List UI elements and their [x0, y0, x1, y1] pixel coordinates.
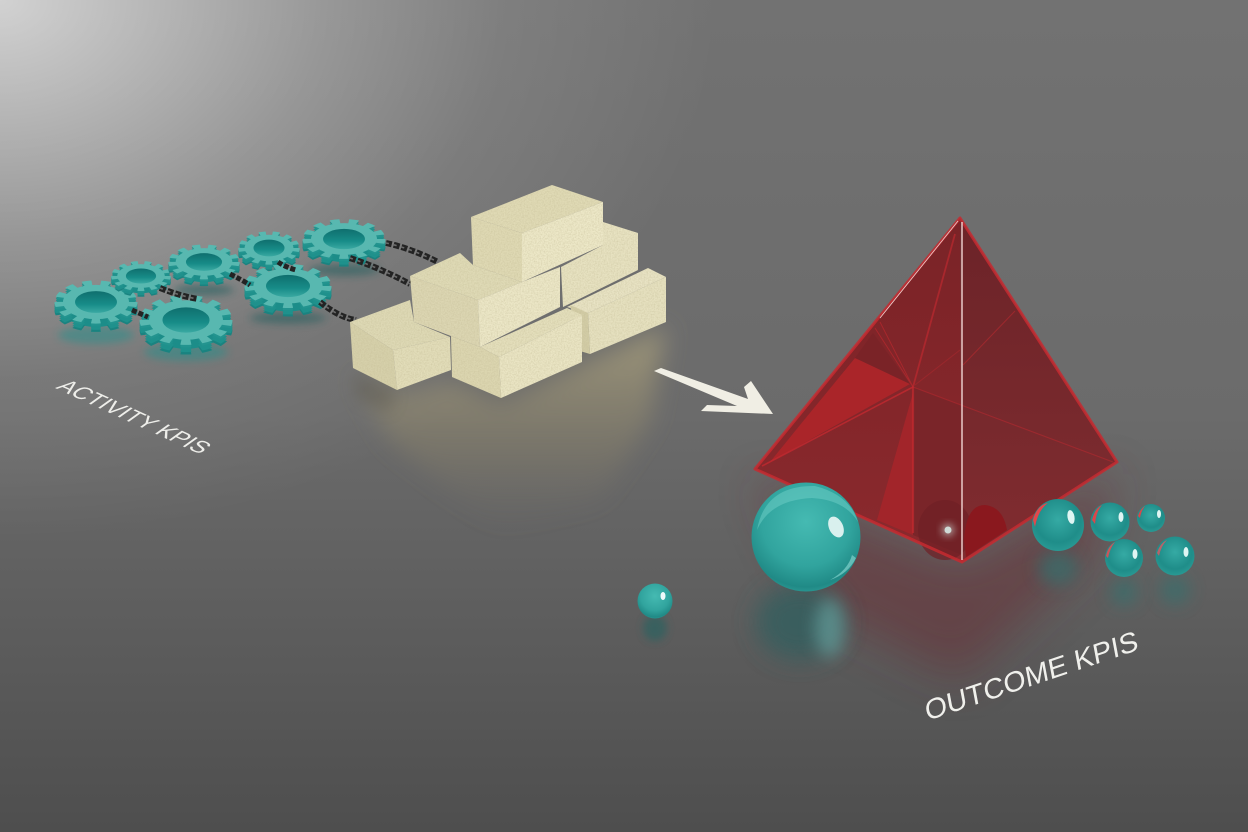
activity gears group: [60, 222, 380, 351]
sphere 4: [1105, 539, 1143, 577]
sphere 3: [1137, 504, 1165, 532]
brick: front centre: [451, 308, 582, 398]
gear 7: [308, 222, 380, 264]
chains linking gears to bricks: [132, 243, 438, 320]
floor reflection of bricks: [354, 328, 665, 530]
glass pyramid: [755, 218, 1117, 562]
floor reflection of pyramid: [756, 470, 1116, 680]
pyramid left face: [755, 218, 962, 562]
pyramid inner wedge: [877, 393, 913, 535]
pyramid inner sphere refraction: [918, 500, 1007, 560]
stack of foundation bricks: [350, 185, 666, 398]
pyramid central darker panel: [913, 387, 962, 555]
brick: top: [471, 185, 603, 282]
brick: back right lower: [567, 268, 666, 354]
floor reflections of gears: [58, 264, 380, 361]
pyramid edges: [755, 218, 1117, 562]
label: outcome KPIs: OUTCOME KPIS: [922, 625, 1140, 727]
gear 3: [115, 263, 167, 295]
gear 5: [242, 234, 296, 269]
sphere 2: [1090, 502, 1130, 542]
gear 2: [146, 298, 226, 351]
gear 6: [250, 267, 326, 314]
large teal sphere: [752, 482, 860, 592]
brick: middle left: [410, 253, 560, 347]
cluster of teal spheres: [1032, 499, 1194, 577]
arrow pointing from bricks to pyramid: [654, 368, 773, 414]
gear 1: [60, 283, 132, 329]
sphere 5: [1156, 536, 1194, 576]
sphere 1: [1032, 499, 1084, 551]
sphere reflections on floor: [643, 550, 1190, 660]
pyramid inner bright panel: [770, 358, 910, 462]
brick: front left: [350, 300, 451, 390]
pyramid right face: [960, 218, 1117, 562]
small teal sphere near centre: [638, 584, 672, 618]
pyramid front highlight edge: [961, 222, 963, 560]
gear 4: [173, 247, 235, 284]
brick: back right upper: [561, 222, 638, 307]
label: activity KPIs: ACTIVITY KPIS: [51, 376, 218, 457]
